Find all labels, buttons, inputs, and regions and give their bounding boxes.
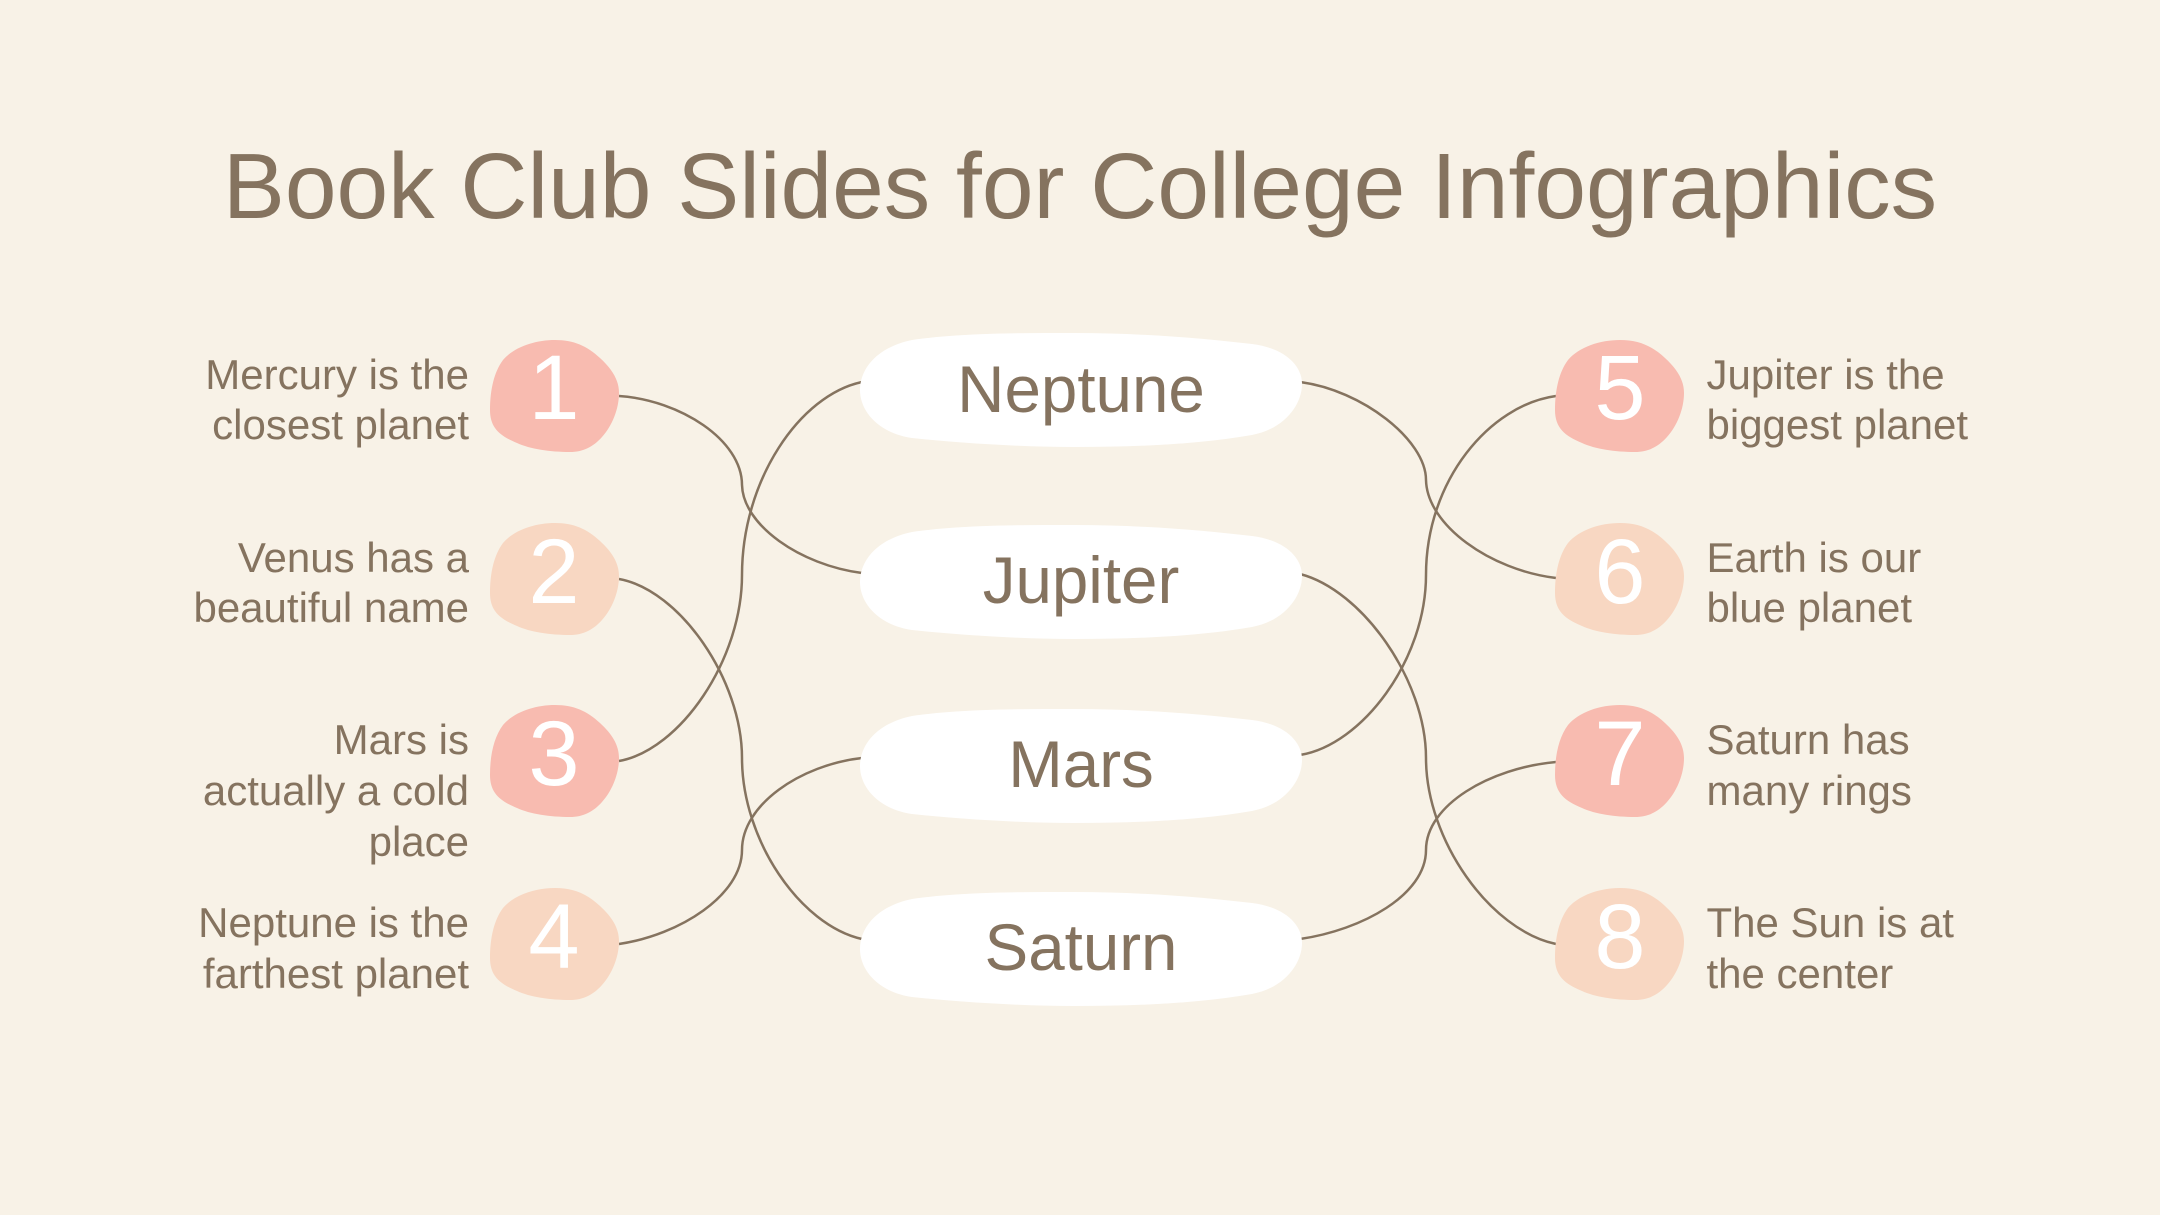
pill: Saturn: Saturn [985, 911, 1177, 984]
item 8 text: The Sun is at [1706, 899, 1954, 946]
item 8 text [1706, 899, 1954, 997]
item 6 badge: 6 [1594, 521, 1646, 623]
item 5 badge: 5 [1594, 337, 1646, 439]
item 8 badge [1555, 886, 1684, 1000]
item 4 badge [490, 886, 619, 1000]
item 7 text: Saturn has [1706, 716, 1910, 763]
item 7 badge [1555, 703, 1684, 817]
item 7 text [1706, 716, 1912, 814]
item 6 text: Earth is our [1706, 534, 1921, 581]
item 3 text: place [369, 818, 469, 865]
item 5 text [1706, 351, 1968, 448]
item 7 badge: 7 [1594, 703, 1646, 805]
item 3 badge: 3 [528, 703, 580, 805]
item 6 badge [1555, 521, 1684, 635]
item 1 text [205, 351, 469, 448]
item 4 text: farthest planet [203, 950, 469, 997]
item 3 text: Mars is [334, 716, 469, 763]
item 5 text: Jupiter is the [1706, 351, 1945, 398]
item 6 text: blue planet [1706, 584, 1912, 631]
item 2 text [193, 534, 470, 631]
connectors: left side [619, 382, 862, 944]
pill: Jupiter: Jupiter [983, 544, 1179, 617]
pill: Mars [860, 709, 1302, 823]
item 1 text: closest planet [212, 401, 469, 448]
item 8 text: the center [1706, 950, 1893, 997]
item 6 text [1706, 534, 1921, 631]
item 1 badge [490, 337, 619, 452]
pill: Neptune [860, 333, 1302, 447]
title: Book Club Slides for College Infographics [223, 134, 1937, 238]
item 3 text [203, 716, 469, 865]
item 7 text: many rings [1706, 767, 1912, 814]
item 4 badge: 4 [528, 886, 580, 988]
item 2 text: beautiful name [193, 584, 469, 631]
pill: Mars: Mars [1008, 728, 1154, 801]
item 4 text [198, 899, 469, 997]
pill: Neptune: Neptune [957, 353, 1205, 426]
item 5 text: biggest planet [1706, 401, 1968, 448]
connectors: right side [1300, 382, 1556, 944]
item 3 text: actually a cold [203, 767, 469, 814]
item 2 text: Venus has a [238, 534, 470, 581]
item 2 badge: 2 [528, 521, 580, 623]
item 4 text: Neptune is the [198, 899, 469, 946]
item 2 badge [490, 521, 619, 635]
item 8 badge: 8 [1594, 886, 1646, 988]
item 1 text: Mercury is the [205, 351, 469, 398]
pill: Jupiter [860, 525, 1302, 639]
item 5 badge [1555, 337, 1684, 452]
item 3 badge [490, 703, 619, 817]
item 1 badge: 1 [528, 337, 580, 439]
pill: Saturn [860, 892, 1302, 1006]
